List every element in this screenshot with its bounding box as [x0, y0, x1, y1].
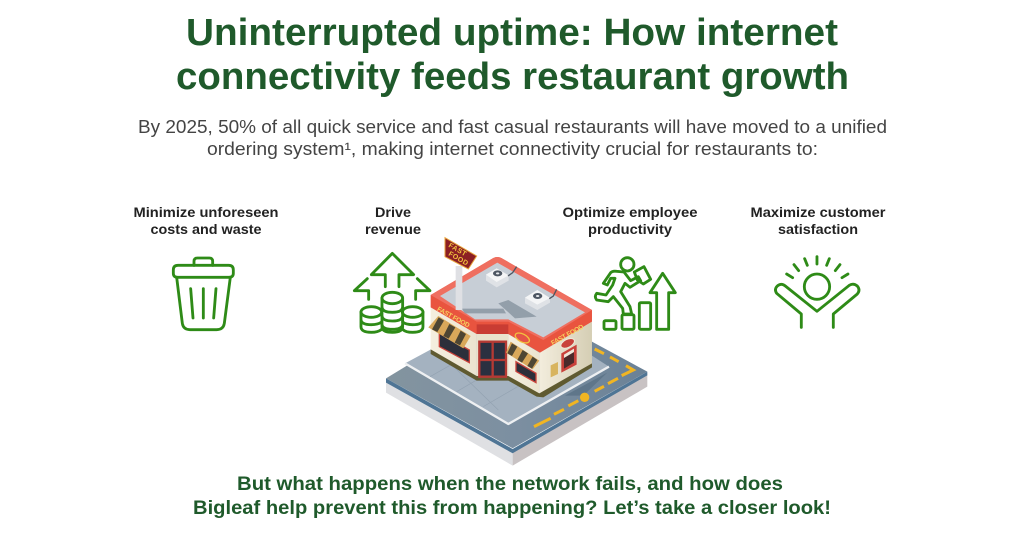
illustration: fast food restaurant: FAST FOOD	[550, 323, 585, 347]
awnings	[428, 316, 471, 348]
icon: employee running up bars	[595, 258, 675, 329]
illustration: fast food restaurant: FAST	[447, 242, 468, 258]
title	[176, 12, 849, 98]
heading: drive revenue: revenue	[365, 222, 422, 237]
closing text	[193, 473, 831, 519]
heading: customer satisfaction: satisfaction	[778, 222, 858, 237]
icon: trash can	[173, 258, 233, 330]
AC units	[486, 268, 509, 287]
intro text: By 2025, 50% of all quick service and fast casual restaurants will have moved to a unified	[138, 117, 887, 137]
heading: customer satisfaction	[750, 205, 886, 237]
closing text: But what happens when the network fails, and how does	[237, 473, 783, 495]
heading: optimize productivity: productivity	[588, 222, 673, 237]
icon: happy customer	[775, 257, 859, 327]
intro text	[138, 117, 887, 159]
heading: minimize costs: costs and waste	[150, 222, 262, 237]
heading: optimize productivity: Optimize employee	[562, 205, 698, 220]
heading: minimize costs: Minimize unforeseen	[134, 205, 278, 220]
pole and sign	[456, 266, 462, 310]
windows and door	[439, 333, 469, 363]
heading: customer satisfaction: Maximize customer	[750, 205, 886, 220]
intro text: ordering system¹, making internet connectivity crucial for restaurants to:	[207, 139, 818, 159]
title: Uninterrupted uptime: How internet	[186, 12, 838, 54]
closing text: Bigleaf help prevent this from happening? Let’s take a closer look!	[193, 497, 831, 519]
roof shadow: pole	[462, 309, 506, 313]
heading: drive revenue: Drive	[375, 205, 412, 220]
road markings	[534, 349, 633, 427]
illustration: fast food restaurant	[386, 238, 647, 466]
building shadow	[565, 373, 607, 396]
pavement	[405, 305, 609, 424]
roof	[431, 257, 592, 353]
building walls	[431, 307, 477, 378]
icon: coins and arrows	[354, 253, 430, 332]
base block	[386, 380, 513, 466]
side window	[561, 345, 577, 373]
oval sign	[514, 331, 531, 345]
illustration: fast food restaurant: FOOD	[447, 251, 469, 267]
roof shadow: vent block	[498, 300, 537, 318]
heading: drive revenue	[365, 205, 422, 237]
heading: minimize costs	[134, 205, 278, 237]
heading: optimize productivity	[562, 205, 698, 237]
title: connectivity feeds restaurant growth	[176, 56, 849, 98]
fascia text: FAST FOOD	[436, 306, 471, 330]
